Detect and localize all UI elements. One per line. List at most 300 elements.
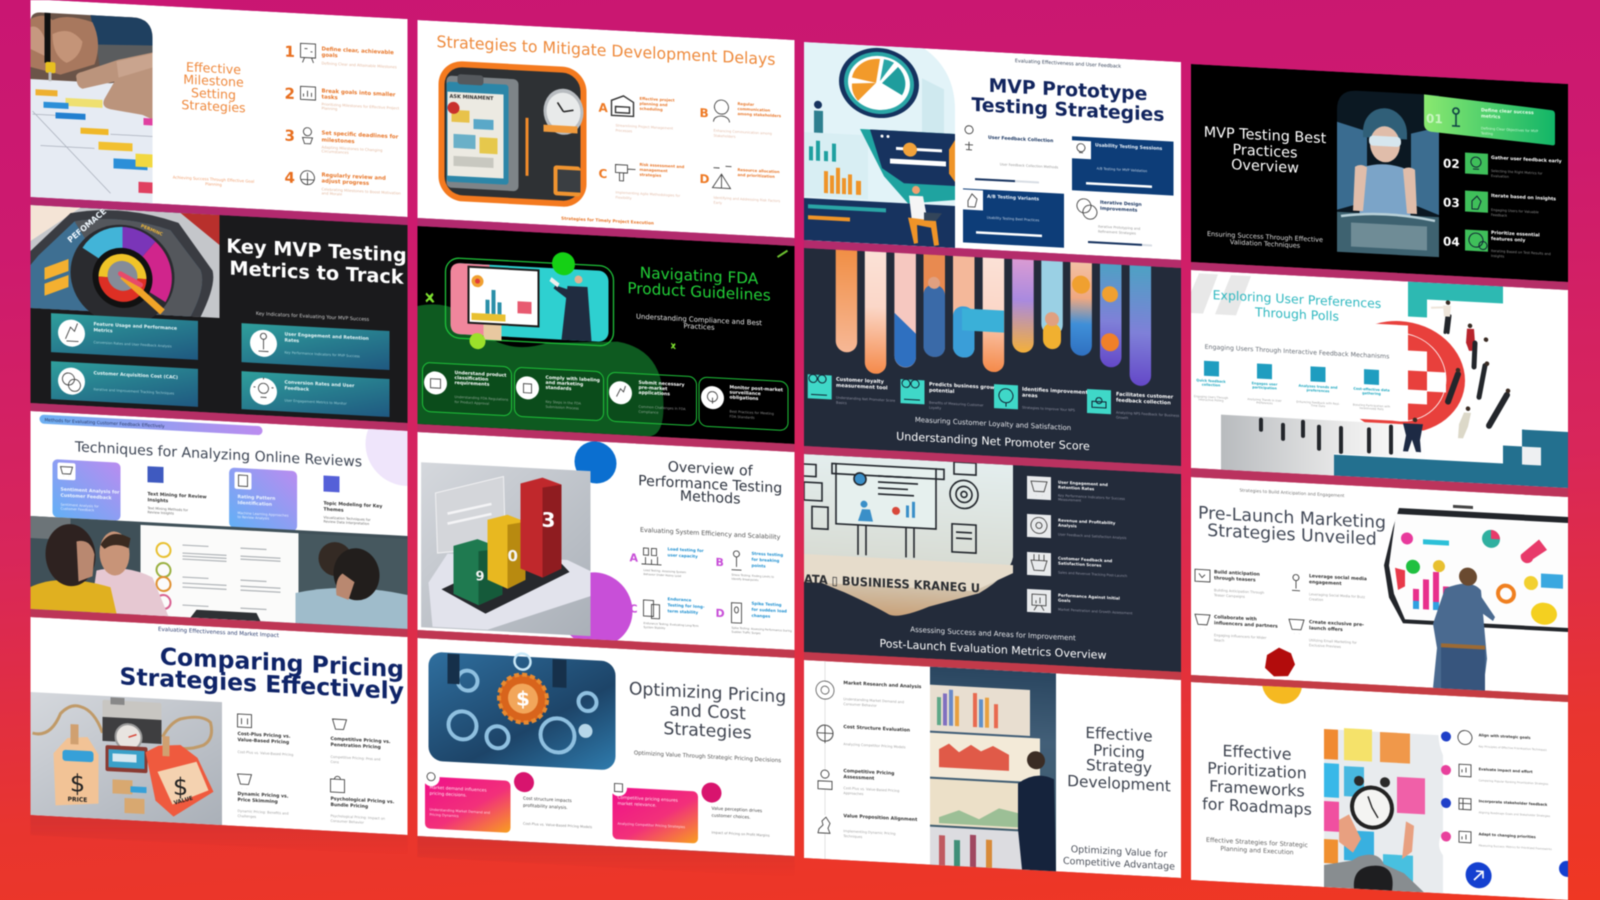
item 2: Loyalty	[929, 406, 941, 410]
image: performance gauge	[30, 203, 220, 330]
item: topic modeling: Review Data Interpretation	[324, 520, 369, 526]
photo strip of people	[1221, 415, 1427, 481]
item C: term stability	[668, 608, 699, 615]
item D: D	[700, 172, 709, 186]
image: 3D bar chart	[421, 462, 590, 636]
metric 3: Satisfaction Scores	[1058, 560, 1102, 568]
title: MVP Testing Best	[1204, 125, 1327, 147]
item D: Resource allocation	[738, 167, 780, 174]
decorative quote mark	[1191, 273, 1251, 316]
title: Strategies Effectively	[120, 662, 404, 705]
poll item 1: collection	[1202, 383, 1221, 388]
text: value perception: Value perception drives	[712, 806, 763, 814]
card 1: Understand product	[454, 370, 507, 379]
kicker: Strategies to Build Anticipation and Engagement	[1240, 488, 1345, 499]
item 3	[994, 384, 1088, 413]
item: topic modeling: Visualization Techniques for	[324, 516, 371, 522]
numbered list: Celebrating Milestones to Boost Motivation	[322, 187, 401, 196]
poll item 4: Boosting Participation with	[1353, 403, 1390, 409]
card: rating pattern	[229, 468, 297, 531]
slide: MVP Prototype Testing Strategies	[804, 42, 1181, 260]
item 3: influencers and partners	[1214, 620, 1278, 630]
metric card 3: Iterative and Improvement Tracking Techniques	[94, 387, 174, 396]
image: 3D bar chart: 3	[542, 508, 555, 532]
slide: Effective Pricing Strategy Development	[804, 660, 1181, 878]
subtitle: Planning and Execution	[1220, 846, 1294, 856]
priority item 2: Comparing Popular Ranking Prioritization Strategies	[1479, 778, 1549, 786]
item 4: Utilizing Email Marketing for	[1309, 638, 1357, 645]
image: man drawing charts on a smart board	[1384, 501, 1569, 695]
poll item 3: Enhancing Feedback with Real-	[1296, 400, 1340, 406]
item B: for breaking	[752, 557, 779, 563]
subtitle: Key Indicators for Evaluating Your MVP Success	[256, 311, 370, 323]
numbered list: goals	[322, 52, 338, 59]
numbered list: Defining Clear and Attainable Milestones	[322, 61, 397, 69]
item 1: Basics	[836, 401, 847, 405]
step 3: Assessment	[843, 774, 875, 782]
step 03: Iterate based on insights	[1491, 193, 1556, 202]
item 3: Engaging Influencers for Wider	[1214, 633, 1267, 640]
item C	[598, 162, 685, 200]
card 1: requirements	[454, 380, 490, 388]
metric card 2: User Engagement and Retention	[284, 331, 369, 342]
card: iterative design improvements: Iterative Prototyping and	[1098, 225, 1140, 231]
item A: Effective project	[640, 96, 675, 103]
poll item 3: Time Data	[1310, 403, 1325, 408]
card: user feedback collection: User Feedback Collection	[988, 135, 1053, 144]
numbered list: tasks	[322, 94, 338, 101]
priority item 3: Incorporate stakeholder feedback	[1479, 799, 1548, 807]
item: dynamic: Challenges	[238, 814, 256, 819]
item 2: engagement	[1309, 579, 1342, 587]
item 4: launch offers	[1309, 625, 1343, 633]
title: Milestone	[183, 72, 244, 90]
title: Techniques for Analyzing Online Reviews	[74, 439, 362, 471]
lilac corner circle	[366, 404, 446, 488]
slide: MVP Testing Best Practices Overview	[1191, 64, 1568, 282]
card 2: Key Steps in the FDA	[546, 400, 582, 406]
metric 2: Revenue and Profitability	[1058, 517, 1116, 526]
item: topic modeling: Themes	[324, 507, 344, 514]
title: Key MVP Testing	[226, 234, 407, 267]
item 3: Identifies improvement	[1022, 387, 1088, 396]
step 04: features only	[1491, 236, 1525, 244]
title: Overview	[1231, 157, 1299, 177]
item: dynamic: Dynamic Pricing: Benefits and	[238, 809, 288, 816]
title: Post-Launch Evaluation Metrics Overview	[880, 637, 1106, 662]
item A: Behavior Under Heavy Load	[644, 572, 681, 578]
item: dynamic: Price Skimming	[238, 797, 278, 805]
card: usability testing sessions: Usability Testing Sessions	[1095, 142, 1163, 152]
item A: A	[630, 551, 638, 565]
item 1: Teaser Campaigns	[1213, 593, 1245, 599]
step 04: Insights	[1491, 254, 1504, 259]
item: competitive: Penetration Pricing	[330, 742, 381, 751]
priority item 1: Key Principles of Effective Prioritization Techniques	[1479, 744, 1547, 752]
priority item 2: Evaluate impact and effort	[1479, 767, 1533, 774]
card: market demand	[423, 769, 510, 833]
kicker text: Evaluating Effectiveness and User Feedback	[1015, 58, 1121, 70]
title: Strategies	[663, 719, 752, 744]
item: competitive: Competitive Pricing: Pros and	[330, 755, 380, 762]
metric card 1	[51, 313, 198, 360]
item: text mining: Review Insights	[148, 510, 174, 516]
item: cost-plus: Value-Based Pricing	[238, 737, 289, 746]
numbered list: 3	[284, 126, 295, 145]
image: clipboard and clock on orange frame: ASK MINAMENT	[450, 94, 494, 102]
title: Pre-Launch Marketing	[1198, 503, 1386, 533]
item 2: Creation	[1309, 597, 1323, 602]
title: Effective	[1223, 741, 1291, 764]
item: topic modeling	[324, 476, 382, 527]
item D: Spike Testing: Assessing Performance During	[732, 626, 792, 633]
card 4: FDA Standards	[730, 415, 755, 420]
numbered list: 4	[284, 168, 295, 187]
poll item 4: gathering	[1362, 391, 1381, 396]
title: Pricing	[1093, 741, 1145, 762]
title: Frameworks	[1209, 776, 1305, 801]
card: iterative design improvements: Improvements	[1100, 206, 1138, 214]
card 4: Monitor post-market	[730, 385, 784, 393]
item D: D	[716, 607, 725, 620]
image: clipboard and clock on orange frame	[438, 60, 586, 208]
item D: Sudden Traffic Surges	[732, 630, 761, 635]
item 1: Build anticipation	[1214, 569, 1260, 578]
text: cost-plus models: Cost-Plus vs. Value-Based Pricing Models	[523, 822, 592, 829]
metric card 3: Customer Acquisition Cost (CAC)	[94, 370, 178, 381]
card 2: Comply with labeling	[546, 375, 600, 384]
priority item 1	[1441, 729, 1547, 752]
numbered list: Circumstances	[322, 149, 349, 155]
item A: scheduling	[640, 106, 663, 112]
card: competitive pricing: market relevance.	[618, 801, 657, 809]
title: Setting	[191, 85, 236, 102]
card: A/B testing variants	[963, 188, 1064, 248]
title: Exploring User Preferences	[1213, 287, 1381, 311]
card 3: Common Challenges in FDA	[638, 405, 686, 411]
text panel backing	[1191, 314, 1446, 424]
item B: Regular	[738, 101, 754, 107]
step 4: Techniques	[842, 834, 862, 839]
subtitle: Competitive Advantage	[1063, 856, 1175, 873]
poll item 3	[1296, 366, 1340, 409]
item 3: areas	[1022, 393, 1038, 399]
title: Strategy	[1086, 756, 1152, 777]
item C: Flexibility	[616, 195, 632, 200]
yellow half circle	[1262, 663, 1302, 705]
poll item 3: Analyzes trends and	[1299, 384, 1338, 390]
subtitle: Ensuring Success Through Effective	[1207, 230, 1323, 244]
footer text: Achieving Success Through Effective Goal	[173, 175, 254, 184]
slide: Exploring User Preferences Through Polls	[1191, 270, 1569, 488]
metric card 1: Conversion Rates and User Feedback Analysis	[94, 340, 172, 348]
item 2: Benefits of Measuring Customer	[929, 401, 984, 408]
item: competitive: Competitive Pricing vs.	[330, 736, 391, 745]
image: price and value tags with camera: PRICE	[68, 796, 87, 804]
teal corner block	[1408, 282, 1503, 322]
card: sentiment analysis: Sentiment Analysis for	[60, 487, 120, 496]
item 1	[1195, 568, 1264, 600]
step 04: Iterating Based on Test Results and	[1491, 249, 1551, 256]
title: Prioritization	[1207, 758, 1307, 783]
poll item 4: Incentivized Polls	[1359, 406, 1384, 411]
item B	[716, 549, 783, 583]
image: performance gauge: PERMINC	[140, 223, 164, 238]
metric card 4: User Engagement Metrics to Monitor	[284, 398, 347, 406]
subtitle: Effective Strategies for Strategic	[1206, 837, 1309, 849]
item A: user capacity	[668, 552, 698, 559]
slide: Optimizing Pricing and Cost Strategies	[418, 638, 794, 856]
card: A/B testing variants: Usability Testing Best Practices	[987, 216, 1040, 222]
item C	[630, 594, 705, 632]
subtitle: Optimizing Value Through Strategic Pricing Decisions	[634, 750, 781, 764]
item B: Stress testing	[752, 551, 783, 557]
image: orange dollar gear among blue gears	[428, 649, 616, 770]
subtitle: Validation Techniques	[1230, 238, 1301, 250]
poll item 2	[1247, 363, 1282, 406]
item: psychological	[330, 776, 395, 826]
metric card 1: Metrics	[94, 327, 113, 334]
numbered list: 1	[284, 42, 295, 61]
item 1: Understanding Net Promoter Score	[836, 396, 895, 403]
slide: Comparing Pricing Strategies Effectively	[30, 617, 408, 835]
item 2: Leveraging Social Media for Buzz	[1309, 592, 1365, 599]
title: Strategies to Mitigate Development Delays	[436, 32, 776, 69]
title: Metrics to Track	[229, 257, 405, 289]
step 4	[815, 812, 918, 842]
poll item 2: Engages user	[1252, 381, 1278, 387]
item 4: Growth	[1116, 416, 1128, 420]
step 01 card	[1424, 94, 1555, 146]
metric card 4	[242, 371, 390, 417]
item B: Stakeholders	[714, 134, 736, 139]
card: market demand: Pricing Dynamics	[429, 813, 459, 818]
card 3: applications	[638, 390, 670, 397]
step 01 card: Defining Clear Objectives for MVP	[1481, 126, 1538, 133]
title: and Cost	[669, 700, 746, 724]
step 04: Prioritize essential	[1491, 230, 1540, 239]
title: Practices	[1232, 142, 1298, 162]
item B: Stress Testing: Finding Limits to	[732, 573, 774, 579]
poll item 4: Cost-effective data	[1353, 387, 1390, 393]
item D: Spike Testing	[752, 601, 782, 607]
metric card 1: Feature Usage and Performance	[94, 321, 177, 332]
item B: among stakeholders	[738, 111, 782, 118]
numbered list: Set specific deadlines for	[322, 130, 399, 141]
icon: magenta circle 2	[702, 782, 722, 803]
numbered list: and Morale	[322, 191, 343, 197]
item B: B	[700, 106, 709, 120]
blue and purple circles	[558, 439, 632, 648]
card 4: Best Practices for Meeting	[730, 410, 774, 416]
step 4: Implementing Dynamic Pricing	[843, 829, 896, 836]
step 3: Cost-Plus vs. Value-Based Pricing	[843, 786, 899, 793]
card 2: and marketing	[546, 380, 583, 388]
metric 1: Retention Rates	[1058, 484, 1095, 491]
item: dynamic: Dynamic Pricing vs.	[238, 791, 289, 800]
image: price and value tags with camera	[30, 692, 222, 825]
image: price and value tags with camera: $	[173, 773, 188, 801]
card 3	[608, 372, 696, 426]
card 1	[422, 362, 512, 416]
numbered list: Planning	[322, 106, 337, 111]
step 2	[817, 723, 910, 750]
card: usability testing sessions	[1072, 136, 1174, 196]
metric card 4: Feedback	[284, 385, 310, 393]
item 3: Strategies to Improve Your NPS	[1022, 406, 1075, 412]
subtitle: Assessing Success and Areas for Improvement	[910, 625, 1076, 642]
image: woman with holographic visor	[1337, 90, 1439, 257]
item D: Identifying and Addressing Risk Factors	[714, 196, 780, 203]
step 03: 03	[1443, 195, 1460, 210]
item D	[700, 165, 780, 208]
poll item 1: Interactive Polling	[1198, 397, 1224, 403]
item 2	[1292, 572, 1367, 604]
step 02: 02	[1443, 156, 1460, 171]
title: Through Polls	[1254, 304, 1339, 324]
card 2: Submission Process	[546, 405, 579, 411]
metric card 3	[51, 361, 198, 407]
item A: Streamlining Project Management	[616, 123, 674, 131]
image: hands holding a clock over sticky notes	[1324, 727, 1443, 893]
item C: strategies	[640, 172, 662, 178]
item: text mining: Insights	[148, 497, 169, 504]
card: usability testing sessions: A/B Testing for MVP Validation	[1097, 167, 1147, 173]
item D	[716, 599, 792, 637]
card: competitive pricing: Competitive pricing ensures	[618, 795, 679, 804]
numbered list: milestones	[322, 137, 355, 145]
priority item 4	[1441, 830, 1552, 851]
item 1	[808, 374, 895, 408]
title: Optimizing Pricing	[629, 679, 786, 708]
illustration: analyst with dashboards	[804, 42, 955, 248]
item: psychological: Psychological Pricing vs.	[330, 796, 395, 805]
image: price and value tags with camera: $	[70, 769, 85, 798]
metric 2: Analysis	[1058, 522, 1077, 528]
metric 2: User Feedback and Satisfaction Analysis	[1058, 532, 1127, 540]
subtitle: Understanding Compliance and Best	[636, 313, 762, 327]
step 01 card: metrics	[1481, 113, 1501, 120]
card 4: surveillance	[730, 390, 761, 397]
title: Understanding Net Promoter Score	[896, 430, 1090, 453]
title: for Roadmaps	[1202, 794, 1312, 819]
item: psychological: Bundle Pricing	[330, 802, 368, 810]
priority item 4: Measuring Success: Metrics for Prioritized Frameworks	[1479, 843, 1552, 851]
title: Effective	[186, 59, 241, 77]
item 4: feedback collection	[1116, 398, 1171, 406]
step 1	[816, 679, 922, 710]
text: cost structure: Cost structure impacts	[523, 796, 573, 804]
hexagon accent	[1265, 647, 1295, 678]
step 03: Feedback	[1491, 213, 1507, 218]
step 1: Market Research and Analysis	[843, 680, 922, 690]
card: market demand: Understanding Market Demand and	[430, 808, 490, 815]
card 3: pre-market	[638, 385, 668, 392]
item: text mining: Text Mining for Review	[148, 491, 207, 500]
card: market demand: Market demand influences	[430, 785, 487, 794]
photo: team reviewing results on a screen	[30, 516, 408, 629]
card: market demand: pricing decisions.	[429, 791, 467, 799]
priority item 2	[1441, 763, 1549, 786]
card 2	[514, 367, 604, 421]
text: value perception: customer choices.	[712, 813, 751, 821]
item C: System Stability	[644, 625, 666, 630]
kicker: Evaluating Effectiveness and Market Impact	[158, 627, 280, 639]
slide: Techniques for Analyzing Online Reviews	[30, 386, 446, 631]
step 3: Competitive Pricing	[843, 768, 894, 777]
step 02: Selecting the Right Metrics for	[1491, 169, 1543, 176]
teal staircase blocks	[1334, 420, 1569, 488]
numbered list: Adapting Milestones to Changing	[322, 145, 382, 153]
priority item 1: Align with strategic goals	[1479, 733, 1531, 740]
footer: Strategies for Timely Project Execution	[561, 216, 654, 226]
card: rating pattern: Machine Learning Approaches	[238, 511, 289, 518]
card: sentiment analysis	[52, 459, 120, 521]
item 4: Facilitates customer	[1116, 392, 1174, 401]
item 1: through teasers	[1214, 575, 1256, 583]
slide: Key MVP Testing Metrics to Track	[30, 203, 408, 423]
text: cost structure: profitability analysis.	[523, 803, 568, 811]
image: 3D bar chart: 9	[476, 569, 485, 585]
item B: Identify Breakpoints	[732, 577, 759, 582]
item 4	[1289, 618, 1364, 650]
metric 1: User Engagement and	[1058, 479, 1108, 487]
step 01 card: Testing	[1480, 131, 1493, 136]
priority item 4: Adapt to changing priorities	[1479, 832, 1536, 839]
item C: C	[598, 167, 607, 181]
metric 2	[1027, 514, 1127, 542]
image: performance gauge: PEFOMACE	[66, 207, 108, 245]
item: topic modeling: Topic Modeling for Key	[324, 501, 382, 510]
step 3	[817, 767, 899, 798]
card: iterative design improvements: Refinement Strategies	[1098, 230, 1136, 236]
card: sentiment analysis: Customer Feedback	[60, 493, 113, 501]
slide: Overview of Performance Testing Methods	[418, 432, 794, 657]
title: Product Guidelines	[627, 279, 771, 305]
step 1: Understanding Market Demand and	[843, 697, 904, 704]
image: presenter at data screen	[446, 246, 614, 356]
photo: hand placing sticky notes on a board	[30, 12, 152, 203]
subtitle: Evaluating System Efficiency and Scalability	[640, 527, 781, 541]
card: sentiment analysis: Customer Feedback	[60, 507, 94, 512]
slide: Pre-Launch Marketing Strategies Unveiled	[1191, 477, 1569, 695]
icon: magenta circle 1	[514, 772, 534, 793]
subtitle: Engaging Users Through Interactive Feedback Mechanisms	[1205, 344, 1389, 361]
item B: B	[716, 556, 724, 569]
card 4	[699, 377, 788, 431]
subtitle: Practices	[683, 322, 715, 332]
title: Effective	[1085, 724, 1153, 745]
item D: and prioritization	[738, 172, 775, 179]
card 1: classification	[454, 375, 488, 383]
kicker pill	[40, 414, 262, 435]
step 04: 04	[1443, 234, 1460, 249]
card: user feedback collection: User Feedback Collection Methods	[1000, 162, 1058, 169]
slide: Strategies to Mitigate Development Delays	[418, 20, 794, 238]
item 3	[1195, 613, 1278, 646]
item A	[630, 544, 704, 579]
item: psychological: Psychological Pricing: Impact on	[330, 814, 385, 821]
poll item 1: Quick feedback	[1196, 378, 1226, 384]
numbered list: Define clear, achievable	[322, 46, 394, 56]
poll item 3: preferences	[1307, 388, 1329, 393]
poll item 2: participation	[1252, 385, 1277, 391]
title: Overview of	[668, 459, 754, 480]
title: Testing Strategies	[972, 95, 1164, 126]
item C: Testing for long-	[668, 602, 705, 609]
step 02: Evaluation	[1491, 174, 1509, 179]
numbered list: Regularly review and	[322, 172, 386, 182]
